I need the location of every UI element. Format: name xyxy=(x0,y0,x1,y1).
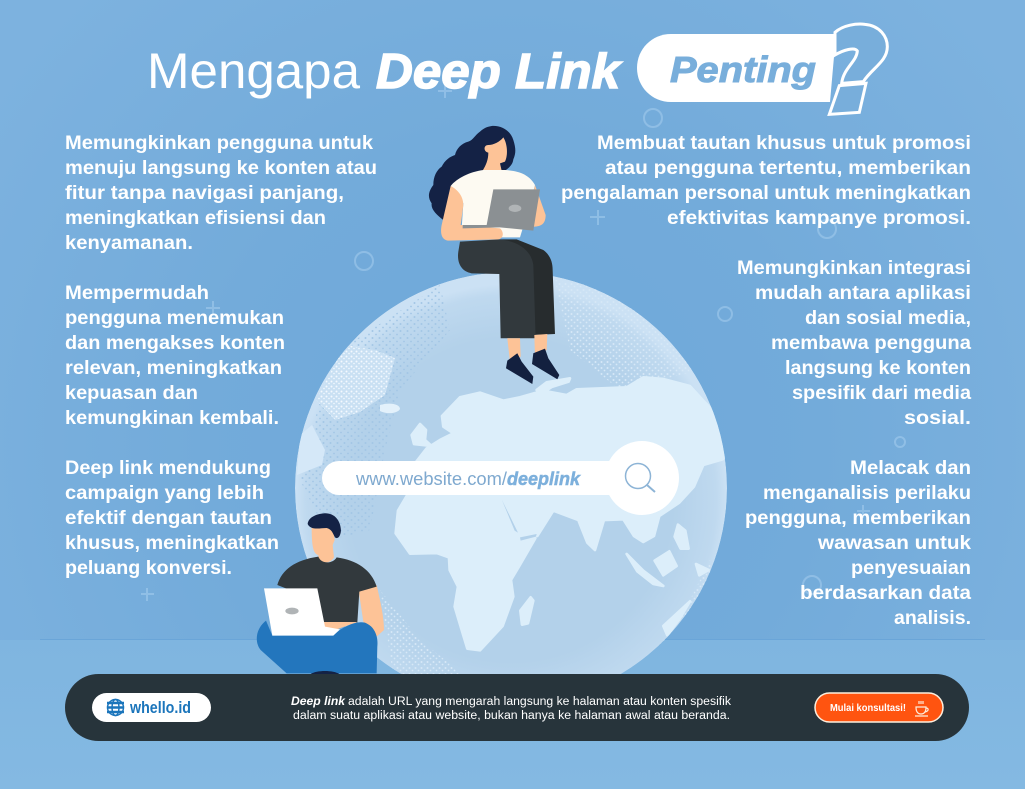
text block: left 1: kenyamanan. xyxy=(65,233,193,254)
search url bold text: deeplink xyxy=(507,469,581,489)
pants back leg xyxy=(500,239,555,335)
land: africa xyxy=(396,495,535,650)
laptop xyxy=(264,588,340,636)
icon: coffee cup xyxy=(915,701,928,716)
land: north america edge xyxy=(297,425,325,475)
land: arctic island xyxy=(537,378,570,394)
land: madagascar xyxy=(520,597,533,625)
text block: right 3: analisis. xyxy=(894,608,971,629)
logo pill xyxy=(92,693,211,722)
text block: right 3: Melacak dan xyxy=(850,458,971,479)
neck and face xyxy=(483,137,507,171)
footer description xyxy=(291,696,731,722)
call-to-action button: Mulai konsultasi! xyxy=(830,702,906,714)
land: asia pacific islands xyxy=(627,525,709,635)
hair xyxy=(308,513,341,538)
text block: left 1: Memungkinkan pengguna untuk xyxy=(65,133,373,154)
right arm xyxy=(358,585,384,637)
text block: left 1: menuju langsung ke konten atau xyxy=(65,158,377,179)
jeans xyxy=(257,621,377,673)
text block: right 3 xyxy=(745,458,971,629)
text block: right 2 xyxy=(737,258,971,429)
text block: left 2: dan mengakses konten xyxy=(65,333,285,354)
text block: right 1: pengalaman personal untuk meningkatkan xyxy=(561,183,971,204)
shoes xyxy=(506,349,559,384)
globe xyxy=(295,274,727,674)
illustration: woman with laptop xyxy=(429,126,559,384)
text block: left 2: relevan, meningkatkan xyxy=(65,358,282,379)
search bar xyxy=(322,441,679,515)
text block: left 2: pengguna menemukan xyxy=(65,308,284,329)
search url text: www.website.com/ xyxy=(355,469,507,489)
shoes xyxy=(311,671,339,674)
icon: magnifier xyxy=(626,464,655,492)
text block: right 3: pengguna, memberikan xyxy=(745,508,971,529)
hair xyxy=(429,126,515,220)
logo text: whello.id xyxy=(129,699,191,717)
text block: right 2: dan sosial media, xyxy=(805,308,971,329)
title xyxy=(147,43,623,99)
text block: right 1: Membuat tautan khusus untuk promosi xyxy=(597,133,971,154)
back arm xyxy=(530,185,546,227)
text block: right 3: wawasan untuk xyxy=(817,533,971,554)
text block: left 2: Mempermudah xyxy=(65,283,209,304)
laptop logo xyxy=(285,608,299,614)
text block: right 3: berdasarkan data xyxy=(800,583,971,604)
footer description: Deep link xyxy=(291,696,346,708)
text block: right 1 xyxy=(561,133,971,229)
text block: left 3: campaign yang lebih xyxy=(65,483,264,504)
text block: right 1: efektivitas kampanye promosi. xyxy=(667,208,971,229)
title: Mengapa xyxy=(147,43,360,99)
laptop xyxy=(463,189,540,231)
waist xyxy=(323,622,357,629)
red sea xyxy=(502,499,537,541)
text block: left 3: khusus, meningkatkan xyxy=(65,533,279,554)
land: eurasia xyxy=(415,377,732,550)
text block: right 2: Memungkinkan integrasi xyxy=(737,258,971,279)
face and neck xyxy=(312,527,335,562)
text block: right 2: spesifik dari media xyxy=(792,383,971,404)
left arm xyxy=(441,186,503,241)
text block: right 2: langsung ke konten xyxy=(785,358,971,379)
footer bar xyxy=(65,674,969,741)
text block: left 2 xyxy=(65,283,285,429)
footer description: adalah URL yang mengarah langsung ke halaman atau konten spesifik xyxy=(348,696,731,708)
text block: right 3: menganalisis perilaku xyxy=(763,483,971,504)
text block: left 2: kepuasan dan xyxy=(65,383,198,404)
stipple: south rim xyxy=(380,560,710,674)
text block: left 1 xyxy=(65,133,377,254)
text block: right 2: mudah antara aplikasi xyxy=(755,283,971,304)
ankles xyxy=(507,334,547,362)
pants front leg xyxy=(458,239,536,338)
text block: left 3: efektif dengan tautan xyxy=(65,508,272,529)
text block: left 3: Deep link mendukung xyxy=(65,458,271,479)
decorative circles and plus marks xyxy=(141,84,905,601)
icon: globe www xyxy=(107,700,124,716)
text block: right 2: membawa pengguna xyxy=(771,333,971,354)
text block: left 2: kemungkinan kembali. xyxy=(65,408,279,429)
text block: left 1: fitur tanpa navigasi panjang, xyxy=(65,183,344,204)
footer description: dalam suatu aplikasi atau website, bukan hanya ke halaman awal atau beranda. xyxy=(293,710,730,722)
text block: left 1: meningkatkan efisiensi dan xyxy=(65,208,326,229)
shirt xyxy=(451,170,535,237)
laptop logo xyxy=(509,205,521,212)
icon: question mark xyxy=(829,24,887,114)
stipple: greenland xyxy=(316,345,395,420)
stipple: north east xyxy=(555,280,700,390)
title: Deep Link xyxy=(376,45,623,99)
call-to-action button xyxy=(815,693,943,722)
text block: right 2: sosial. xyxy=(904,408,971,429)
title badge: Penting xyxy=(637,34,836,102)
text block: right 1: atau pengguna tertentu, memberikan xyxy=(605,158,971,179)
text block: left 3: peluang konversi. xyxy=(65,558,232,579)
stipple: north america ocean xyxy=(300,285,450,540)
illustration: man with laptop xyxy=(257,513,384,674)
title badge: Penting: Penting xyxy=(670,49,816,90)
text block: right 3: penyesuaian xyxy=(851,558,971,579)
text block: left 3 xyxy=(65,458,279,579)
land: greenland xyxy=(316,345,395,420)
floor xyxy=(0,639,1025,789)
land: uk xyxy=(412,424,432,446)
land: iceland xyxy=(380,404,400,413)
shirt xyxy=(277,557,377,623)
